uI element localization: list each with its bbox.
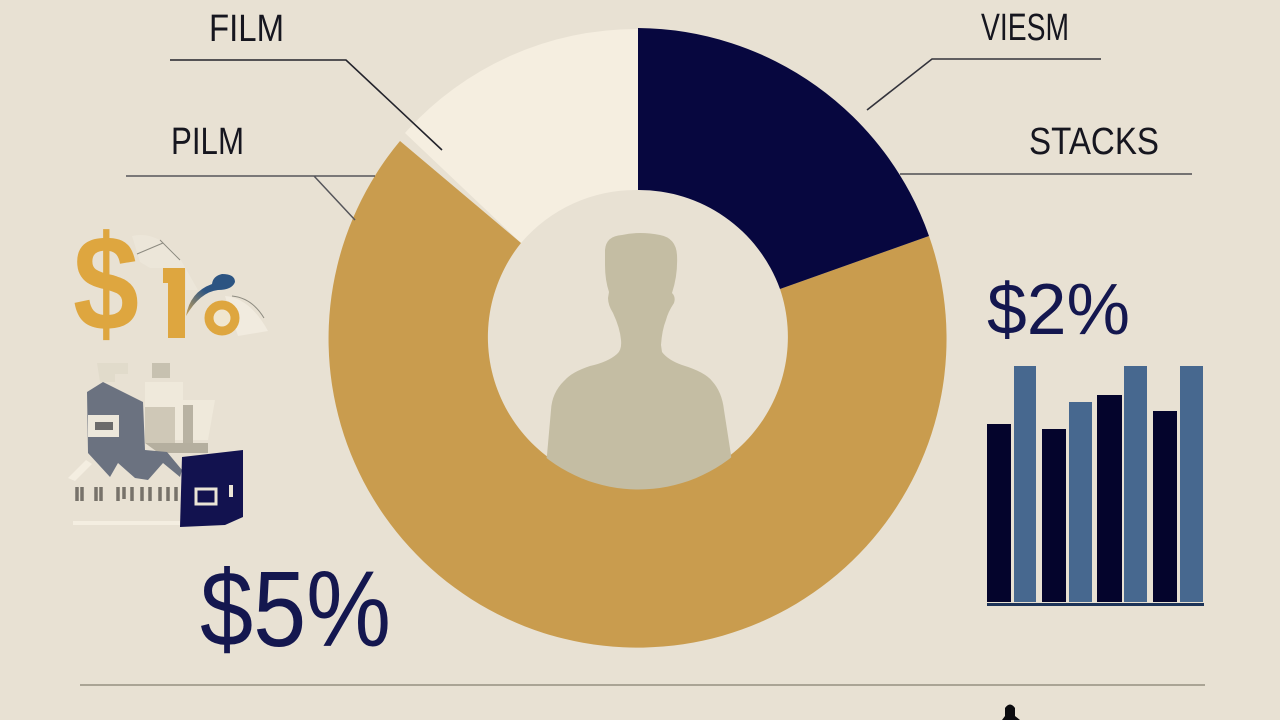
dollar sign: $	[73, 207, 139, 359]
roof and base	[68, 460, 180, 525]
tan block	[145, 407, 175, 443]
label: PILM left: PILM	[171, 121, 244, 163]
chimneys	[97, 363, 128, 382]
donut segment: navy	[638, 28, 929, 289]
grey building	[87, 382, 182, 480]
blue swoosh	[186, 274, 235, 316]
icon: cropped figure at bottom	[1002, 704, 1020, 720]
leader line: STACKS	[900, 173, 1192, 175]
donut segment: cream	[405, 29, 638, 243]
stat: $2%: $2%	[987, 270, 1130, 350]
stat: $5%: $5%	[200, 548, 391, 669]
label: STACKS right: STACKS	[1029, 121, 1159, 163]
label: PILM left	[126, 121, 375, 220]
label: VIESM top right	[867, 7, 1101, 110]
grey building window	[88, 415, 119, 437]
leader line: FILM top	[170, 60, 442, 150]
letter o	[209, 305, 235, 331]
navy bars	[987, 395, 1177, 602]
navy panel	[180, 450, 243, 527]
bar chart	[987, 366, 1204, 606]
blue bars	[1014, 366, 1203, 602]
leader line: VIESM	[867, 59, 1101, 110]
numeral one	[163, 268, 185, 338]
pale block	[145, 382, 215, 440]
icon: dollar percent symbol	[73, 207, 268, 359]
label: VIESM top right: VIESM	[981, 7, 1069, 49]
label: FILM top left: FILM	[209, 8, 284, 50]
icon: buildings	[68, 363, 243, 527]
donut chart	[329, 28, 947, 648]
colonnade	[77, 487, 176, 501]
chart baseline	[987, 603, 1204, 606]
leader line: PILM	[126, 176, 375, 220]
center person silhouette	[540, 233, 735, 500]
label: FILM top left	[170, 8, 442, 150]
navy panel window	[196, 489, 216, 504]
decorative arcs behind symbol	[132, 235, 198, 290]
bottom divider	[80, 684, 1205, 686]
donut segment: gold	[329, 141, 947, 648]
